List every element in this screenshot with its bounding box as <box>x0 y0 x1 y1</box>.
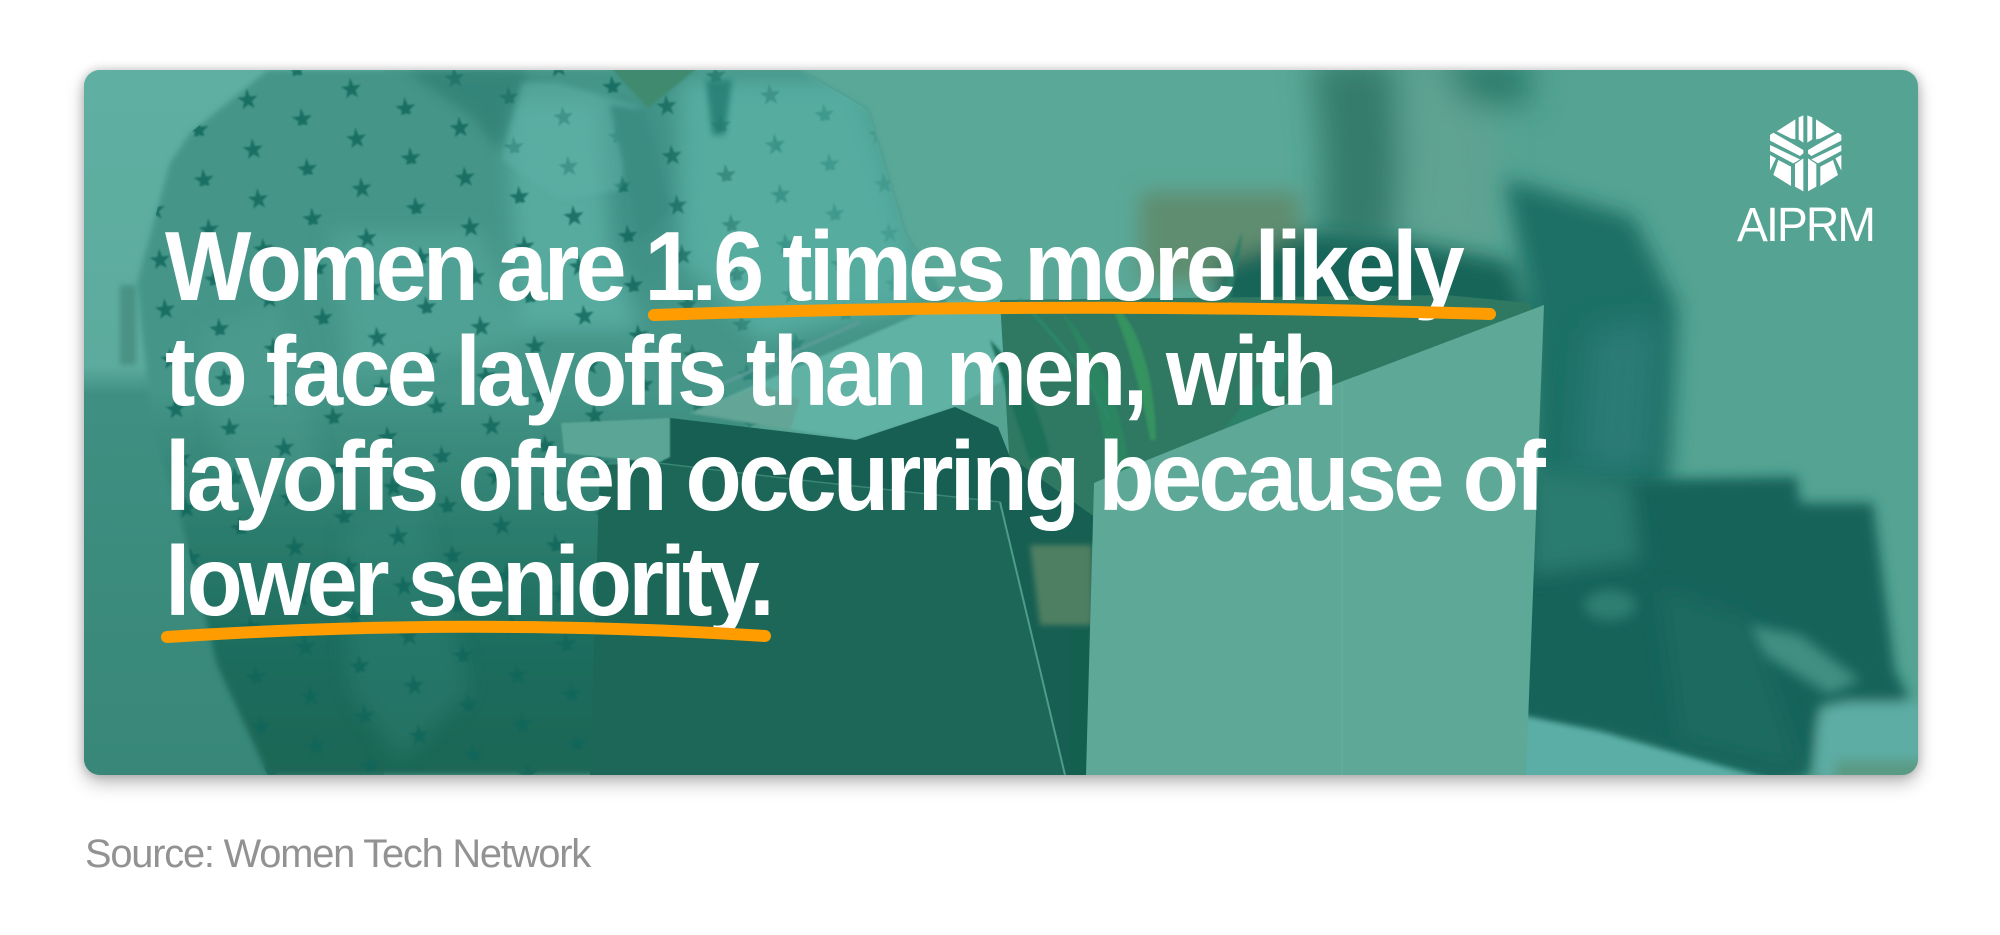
box left flap <box>561 418 670 463</box>
star print <box>150 70 946 775</box>
line 1: Women are 1.6 times more likely <box>165 211 1464 321</box>
light desk <box>1526 714 1761 775</box>
small dot <box>1584 590 1636 620</box>
orange underline: 1.6 times more likely <box>654 308 1490 315</box>
headline <box>165 211 1546 636</box>
torso highlight <box>1580 320 1660 470</box>
orange underline: lower seniority <box>167 627 765 637</box>
logo icon <box>1770 115 1841 191</box>
dark desk block <box>1500 477 1910 785</box>
line 2: to face layoffs than men, with <box>165 316 1334 426</box>
right collar strip <box>706 80 732 135</box>
photo background <box>84 60 1943 797</box>
lower dark <box>1674 606 1692 733</box>
paper and items in box <box>691 300 1003 440</box>
box right panel <box>1086 305 1544 775</box>
plant leaves <box>990 232 1300 480</box>
line 3: layoffs often occurring because of <box>165 421 1546 531</box>
dark collar band <box>415 70 525 145</box>
line 4: lower seniority. <box>165 526 771 636</box>
neck <box>612 70 696 108</box>
brown object <box>1140 192 1300 282</box>
pale roll <box>1808 688 1918 775</box>
card shadow <box>84 70 1918 775</box>
folds <box>84 70 1084 775</box>
head and shoulders <box>1312 60 1400 245</box>
lighter chair area <box>1530 470 1640 575</box>
logo wordmark: AIPRM <box>1737 199 1874 252</box>
dark shape behind plant <box>1217 232 1530 320</box>
dark placket <box>610 104 642 187</box>
light streak <box>1750 625 1860 695</box>
box dark back panel <box>600 407 1099 775</box>
wall centre <box>800 70 1400 370</box>
person in background <box>1312 60 1530 270</box>
box front <box>590 464 618 775</box>
box inner back <box>1000 295 1531 516</box>
light collar <box>504 82 636 191</box>
shirt <box>84 66 1084 775</box>
source note: Source: Women Tech Network <box>85 832 592 876</box>
torso <box>1505 179 1677 500</box>
left wall <box>84 70 384 775</box>
pot <box>1030 545 1092 625</box>
